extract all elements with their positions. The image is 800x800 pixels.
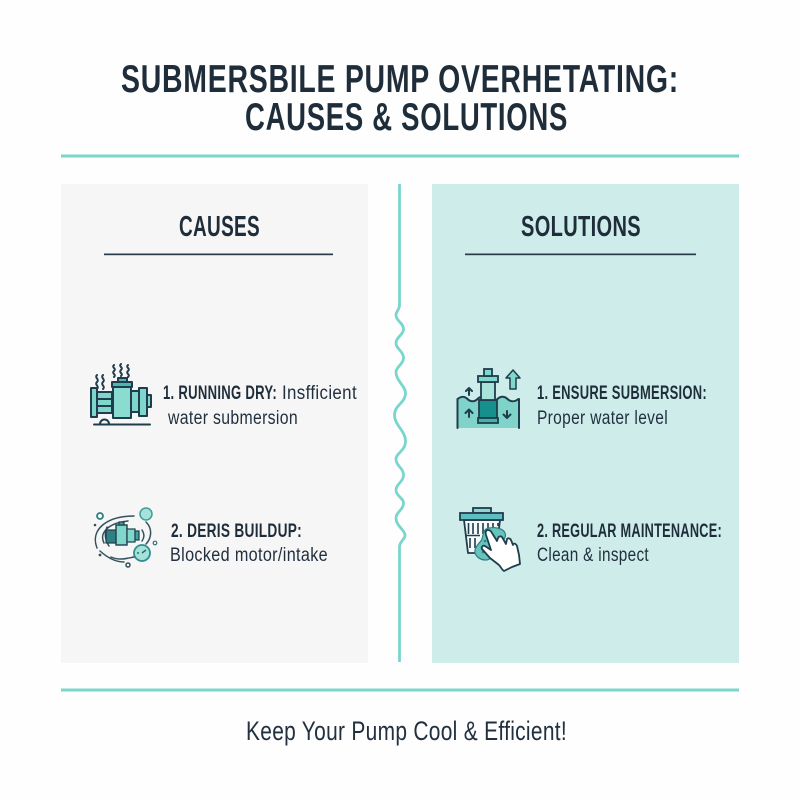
panel: causes — [61, 184, 368, 663]
icon: debris around pump — [94, 508, 157, 567]
footer tagline: Keep Your Pump Cool & Efficient! — [246, 716, 567, 746]
icon: submerged pump — [458, 369, 520, 428]
text: cause 2: 2. DERIS BUILDUP: — [171, 521, 302, 542]
text: cause 2: Blocked motor/intake — [170, 545, 328, 566]
title: CAUSES & SOLUTIONS — [245, 96, 568, 139]
icon: cleaning basket — [460, 508, 520, 571]
text: cause 1 — [163, 383, 357, 429]
text: cause 1: Insfficient — [282, 383, 357, 404]
text: cause 2 — [170, 521, 328, 566]
divider: wavy line — [394, 184, 406, 662]
text: cause 1: 1. RUNNING DRY: — [163, 383, 277, 404]
text: cause 1: water submersion — [167, 408, 298, 429]
heading: solutions: SOLUTIONS — [521, 211, 641, 243]
text: solution 1: Proper water level — [537, 408, 668, 429]
icon: overheating pump — [91, 364, 151, 424]
text: solution 1: 1. ENSURE SUBMERSION: — [537, 383, 707, 404]
text: solution 1 — [537, 383, 707, 429]
text: solution 2: Clean & inspect — [537, 545, 649, 566]
heading: causes: CAUSES — [179, 211, 260, 243]
panel: solutions — [432, 184, 739, 663]
text: solution 2 — [537, 521, 722, 566]
title — [121, 58, 679, 139]
